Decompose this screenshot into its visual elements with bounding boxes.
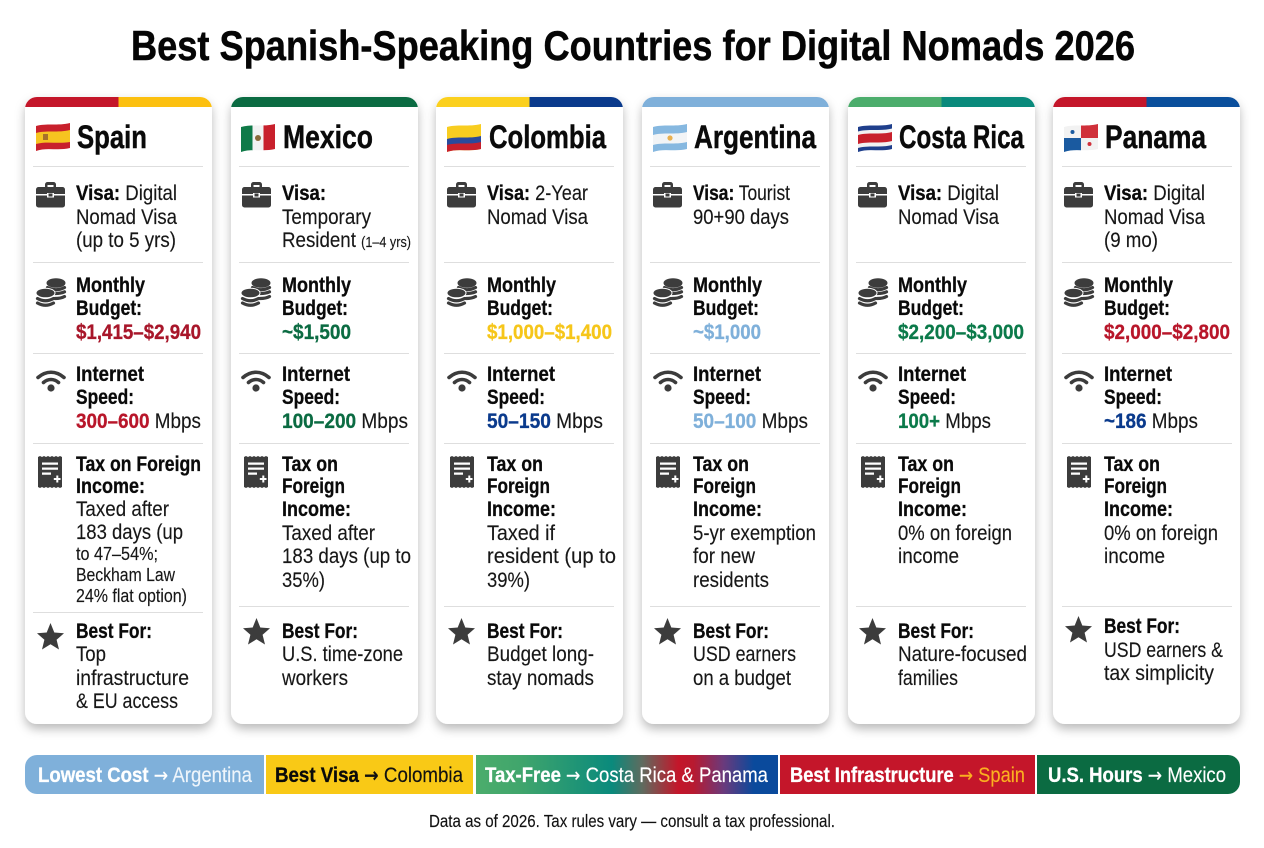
row: monthly budget: Monthly: [487, 273, 556, 297]
row: tax on foreign income: [450, 452, 616, 592]
row: visa: 90+90 days: [693, 205, 789, 229]
row: monthly budget: [241, 273, 351, 344]
row: internet speed: [38, 362, 201, 433]
panel: Argentina: [642, 97, 829, 724]
row: tax on foreign income: Tax on: [693, 452, 749, 476]
row: best for: [654, 618, 796, 690]
row: tax on foreign income: Income:: [693, 497, 762, 521]
row: best for: Nature-focused: [898, 642, 1027, 666]
row: monthly budget: Monthly: [1104, 273, 1173, 297]
row: tax on foreign income: 5-yr exemption: [693, 521, 816, 545]
row: tax on foreign income: Tax on: [282, 452, 338, 476]
row: tax on foreign income: 0% on foreign: [898, 521, 1012, 545]
row: tax on foreign income: Tax on: [487, 452, 543, 476]
row: internet speed: 50–150 Mbps: [487, 409, 603, 433]
flag: Mexico: [241, 124, 275, 152]
row: tax on foreign income: for new: [693, 544, 755, 568]
row: best for: U.S. time-zone: [282, 642, 403, 666]
segment: tax-free: [476, 755, 778, 794]
top colour bar: [848, 97, 1035, 107]
segment: tax-free: Tax-Free → Costa Rica & Panama: [485, 763, 768, 787]
row: tax on foreign income: Foreign: [693, 474, 756, 498]
heading: Costa Rica: Costa Rica: [899, 119, 1024, 155]
row: best for: workers: [281, 666, 348, 690]
row: monthly budget: [653, 273, 762, 344]
row: visa: Nomad Visa: [1104, 205, 1205, 229]
row: best for: Best For:: [898, 619, 974, 643]
row: monthly budget: [858, 273, 1024, 344]
row: tax on foreign income: residents: [693, 568, 769, 592]
row: best for: Top: [76, 642, 106, 666]
row: internet speed: 100–200 Mbps: [282, 409, 408, 433]
row: tax on foreign income: Foreign: [898, 474, 961, 498]
row: visa: Visa: 2-Year: [487, 181, 588, 205]
segment: us hours: [1037, 755, 1240, 794]
row: best for: Budget long-: [487, 642, 594, 666]
row: visa: Temporary: [282, 205, 371, 229]
top colour bar: [231, 97, 418, 107]
row: internet speed: Internet: [1104, 362, 1172, 386]
flag: Panama: [1064, 124, 1098, 152]
row: tax on foreign income: income: [898, 544, 959, 568]
panel: Mexico: [231, 97, 418, 724]
title: Best Spanish-Speaking Countries for Digital Nomads 2026: [131, 22, 1135, 69]
row: best for: Best For:: [76, 619, 152, 643]
row: internet speed: Speed:: [282, 385, 340, 409]
row: internet speed: [655, 362, 808, 433]
row: visa: Visa: Digital: [898, 181, 999, 205]
row: monthly budget: [447, 273, 612, 344]
row: internet speed: Speed:: [487, 385, 545, 409]
row: visa: Visa:: [282, 181, 326, 205]
row: internet speed: 50–100 Mbps: [693, 409, 808, 433]
row: internet speed: 100+ Mbps: [898, 409, 991, 433]
row: visa: Resident (1–4 yrs): [282, 228, 411, 252]
row: tax on foreign income: 0% on foreign: [1104, 521, 1218, 545]
row: internet speed: Speed:: [898, 385, 956, 409]
flag: Argentina: [653, 124, 687, 152]
segment: best visa: Best Visa → Colombia: [275, 763, 463, 787]
row: monthly budget: Monthly: [76, 273, 145, 297]
heading: Spain: Spain: [77, 119, 147, 155]
row: tax on foreign income: 35%): [282, 568, 325, 592]
row: best for: tax simplicity: [1104, 661, 1214, 685]
row: tax on foreign income: Foreign: [282, 474, 345, 498]
row: monthly budget: $2,000–$2,800: [1104, 320, 1230, 344]
row: monthly budget: ~$1,500: [282, 320, 351, 344]
row: tax on foreign income: resident (up to: [487, 544, 616, 568]
row: tax on foreign income: [656, 452, 816, 592]
row: best for: USD earners: [693, 642, 796, 666]
row: best for: stay nomads: [487, 666, 594, 690]
row: visa: Nomad Visa: [487, 205, 588, 229]
row: best for: [37, 619, 189, 713]
row: internet speed: [860, 362, 991, 433]
row: internet speed: Internet: [76, 362, 144, 386]
row: internet speed: [449, 362, 603, 433]
row: best for: Best For:: [282, 619, 358, 643]
row: best for: USD earners &: [1104, 638, 1223, 662]
row: tax on foreign income: Beckham Law: [76, 564, 176, 585]
row: internet speed: Speed:: [1104, 385, 1162, 409]
card background: [25, 97, 212, 724]
card background: [642, 97, 829, 724]
row: monthly budget: $2,200–$3,000: [898, 320, 1024, 344]
row: internet speed: Speed:: [693, 385, 751, 409]
row: monthly budget: Monthly: [898, 273, 967, 297]
heading: Mexico: Mexico: [283, 119, 373, 155]
row: tax on foreign income: 183 days (up: [76, 520, 183, 544]
row: best for: [243, 618, 403, 690]
top colour bar: [436, 97, 623, 107]
row: tax on foreign income: [244, 452, 411, 592]
panel: Panama: [1053, 97, 1240, 724]
row: best for: Best For:: [487, 619, 563, 643]
segment: us hours: U.S. Hours → Mexico: [1048, 763, 1226, 787]
panel: Colombia: [436, 97, 623, 724]
top colour bar: [25, 97, 212, 107]
row: tax on foreign income: 183 days (up to: [282, 544, 411, 568]
segment: best infrastructure: [780, 755, 1035, 794]
card background: [1053, 97, 1240, 724]
row: internet speed: ~186 Mbps: [1104, 409, 1198, 433]
segment: lowest cost: [25, 755, 264, 794]
row: internet speed: Internet: [693, 362, 761, 386]
row: visa: Nomad Visa: [76, 205, 177, 229]
panel: Spain: [25, 97, 212, 724]
segment: best visa: [266, 755, 473, 794]
row: tax on foreign income: 39%): [487, 568, 530, 592]
card background: [436, 97, 623, 724]
row: monthly budget: [1064, 273, 1230, 344]
row: best for: [1065, 614, 1223, 685]
row: tax on foreign income: Income:: [76, 474, 145, 498]
top colour bar: [642, 97, 829, 107]
row: tax on foreign income: [1067, 452, 1218, 568]
row: monthly budget: Budget:: [282, 296, 348, 320]
segment: best infrastructure: Best Infrastructure → Spain: [790, 763, 1025, 787]
top colour bar: [1053, 97, 1240, 107]
row: best for: Best For:: [693, 619, 769, 643]
flag: Colombia: [447, 124, 481, 152]
row: tax on foreign income: Tax on: [898, 452, 954, 476]
row: monthly budget: $1,415–$2,940: [76, 320, 201, 344]
row: visa: [447, 181, 588, 229]
row: tax on foreign income: to 47–54%;: [76, 543, 158, 564]
row: tax on foreign income: Taxed after: [76, 497, 169, 521]
row: tax on foreign income: income: [1104, 544, 1165, 568]
card background: [848, 97, 1035, 724]
row: visa: [858, 181, 999, 229]
row: internet speed: Speed:: [76, 385, 134, 409]
heading: Colombia: Colombia: [489, 119, 606, 155]
row: internet speed: [1066, 362, 1198, 433]
row: visa: (9 mo): [1104, 228, 1158, 252]
row: tax on foreign income: Income:: [1104, 497, 1173, 521]
row: internet speed: 300–600 Mbps: [76, 409, 201, 433]
row: best for: families: [898, 666, 958, 690]
row: tax on foreign income: Tax on: [1104, 452, 1160, 476]
row: best for: [448, 618, 594, 690]
row: monthly budget: Monthly: [282, 273, 351, 297]
row: tax on foreign income: Income:: [898, 497, 967, 521]
row: internet speed: Internet: [282, 362, 350, 386]
row: monthly budget: $1,000–$1,400: [487, 320, 612, 344]
row: monthly budget: Monthly: [693, 273, 762, 297]
row: visa: Visa: Digital: [1104, 181, 1205, 205]
segment: lowest cost: Lowest Cost → Argentina: [38, 763, 252, 787]
row: best for: & EU access: [76, 689, 178, 713]
row: internet speed: Internet: [487, 362, 555, 386]
heading: Panama: Panama: [1105, 119, 1206, 155]
row: tax on foreign income: [38, 452, 201, 606]
row: monthly budget: [36, 273, 201, 344]
row: tax on foreign income: Taxed after: [282, 521, 375, 545]
row: monthly budget: Budget:: [898, 296, 964, 320]
card background: [231, 97, 418, 724]
row: best for: [859, 618, 1027, 690]
row: visa: [653, 181, 790, 229]
row: tax on foreign income: Taxed if: [487, 521, 555, 545]
row: visa: Visa: Digital: [76, 181, 177, 205]
row: visa: Visa: Tourist: [693, 181, 790, 205]
row: tax on foreign income: Income:: [487, 497, 556, 521]
row: tax on foreign income: 24% flat option): [76, 585, 187, 606]
row: monthly budget: Budget:: [76, 296, 142, 320]
row: tax on foreign income: Tax on Foreign: [76, 452, 201, 476]
flag: Spain: [36, 123, 70, 151]
footnote: Data as of 2026. Tax rules vary — consult a tax professional.: [429, 811, 835, 831]
row: visa: [36, 181, 177, 252]
row: visa: [242, 181, 411, 252]
panel: Costa Rica: [848, 97, 1035, 724]
summary bar: [25, 755, 1240, 794]
row: monthly budget: Budget:: [487, 296, 553, 320]
row: best for: Best For:: [1104, 614, 1180, 638]
row: visa: Nomad Visa: [898, 205, 999, 229]
heading: Argentina: Argentina: [694, 119, 816, 155]
row: visa: (up to 5 yrs): [76, 228, 176, 252]
row: tax on foreign income: Foreign: [487, 474, 550, 498]
row: best for: on a budget: [693, 666, 791, 690]
row: monthly budget: Budget:: [693, 296, 759, 320]
row: monthly budget: Budget:: [1104, 296, 1170, 320]
row: tax on foreign income: [861, 452, 1012, 568]
row: monthly budget: ~$1,000: [693, 320, 761, 344]
row: visa: [1064, 181, 1205, 252]
row: tax on foreign income: Income:: [282, 497, 351, 521]
row: tax on foreign income: Foreign: [1104, 474, 1167, 498]
flag: Costa Rica: [858, 124, 892, 152]
row: best for: infrastructure: [76, 666, 189, 690]
row: internet speed: Internet: [898, 362, 966, 386]
row: internet speed: [243, 362, 408, 433]
